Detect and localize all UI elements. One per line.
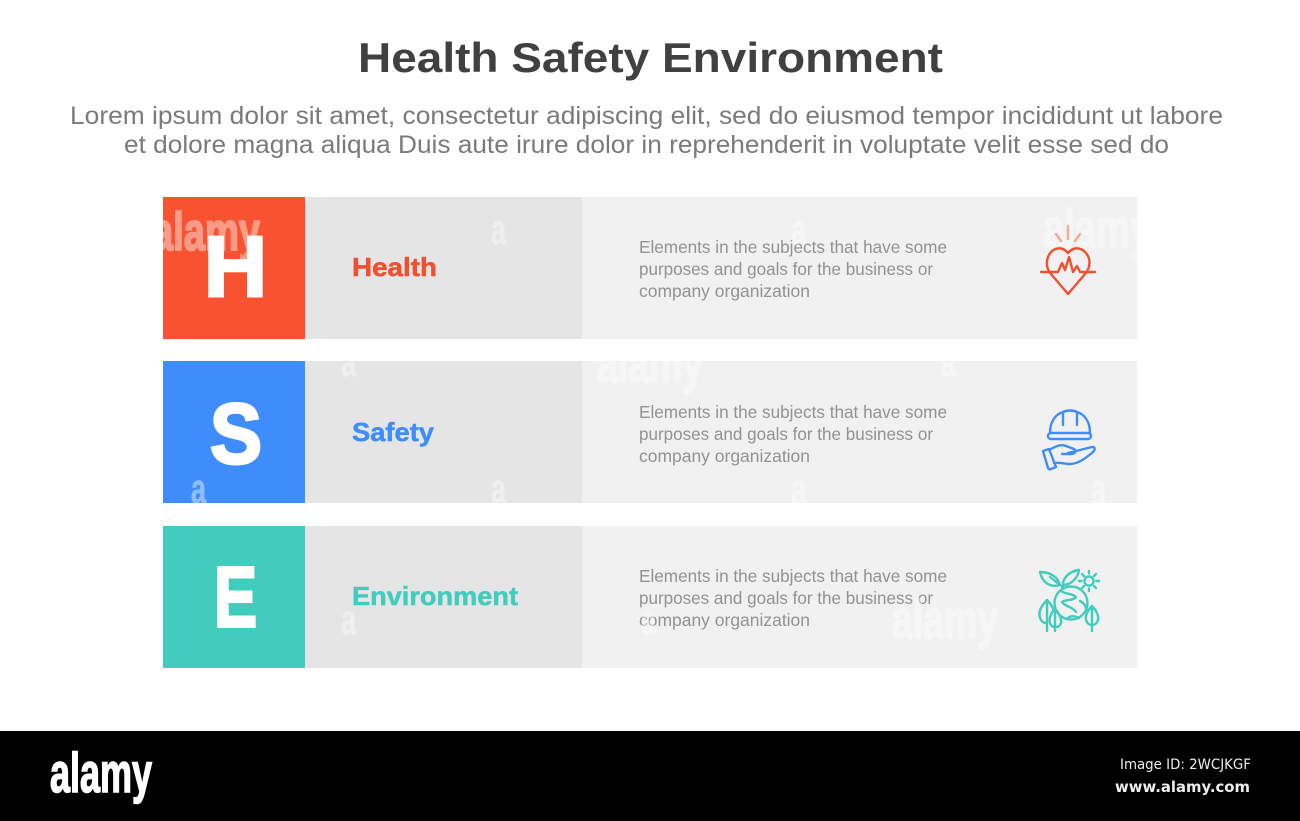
watermark overlays: a xyxy=(641,596,656,643)
icon: helmet over hand xyxy=(1043,410,1095,469)
description: environment: Elements in the subjects that have some xyxy=(639,566,947,586)
description: health: company organization xyxy=(639,281,810,301)
description: safety: Elements in the subjects that have some xyxy=(639,402,947,422)
description: environment xyxy=(639,566,947,630)
watermark overlays: a xyxy=(791,465,806,512)
watermark overlays: a xyxy=(341,338,356,385)
panel: health row xyxy=(163,197,1137,339)
watermark overlays: a xyxy=(191,465,206,512)
letter tile: H xyxy=(163,197,305,339)
image id: Image ID: 2WCJKGF xyxy=(1120,757,1251,773)
watermark overlays: a xyxy=(941,338,956,385)
description: health: purposes and goals for the business or xyxy=(639,259,933,279)
letter S: S xyxy=(210,387,262,482)
subtitle text: et dolore magna aliqua Duis aute irure dolor in reprehenderit in voluptate velit esse sed do xyxy=(124,131,1169,159)
watermark overlays: a xyxy=(341,596,356,643)
description: safety: company organization xyxy=(639,446,810,466)
panel: environment row xyxy=(163,526,1137,668)
icon: earth with leaves, sun and trees xyxy=(1039,570,1099,631)
description: environment: purposes and goals for the business or xyxy=(639,588,933,608)
watermark overlays: alamy xyxy=(152,202,260,262)
description: environment: company organization xyxy=(639,610,810,630)
watermark overlays: a xyxy=(491,206,506,253)
description: safety xyxy=(639,402,947,466)
title: Health Safety Environment xyxy=(358,34,943,81)
watermark overlays: alamy xyxy=(597,334,703,394)
watermark overlays: a xyxy=(1091,465,1106,512)
letter E: E xyxy=(214,550,257,646)
description: health: Elements in the subjects that have some xyxy=(639,237,947,257)
description: safety: purposes and goals for the business or xyxy=(639,424,933,444)
subtitle text xyxy=(70,102,1223,159)
panel: safety row xyxy=(163,361,1137,503)
label: Environment: Environment xyxy=(352,581,518,611)
letter H: H xyxy=(204,220,267,315)
website: www.alamy.com xyxy=(1115,778,1250,796)
watermark overlays: a xyxy=(491,465,506,512)
watermark overlays: a xyxy=(791,206,806,253)
description: health xyxy=(639,237,947,301)
subtitle text: Lorem ipsum dolor sit amet, consectetur adipiscing elit, sed do eiusmod tempor incididunt ut labore xyxy=(70,102,1223,130)
footer bar xyxy=(0,731,1300,821)
label: Safety: Safety xyxy=(352,417,435,447)
letter tile: E xyxy=(163,526,305,668)
icon: heart with pulse xyxy=(1041,226,1095,294)
label: Health: Health xyxy=(352,252,437,282)
watermark overlays xyxy=(152,199,1151,650)
footer logo: alamy xyxy=(50,741,152,804)
letter tile: S xyxy=(163,361,305,503)
watermark overlays: alamy xyxy=(892,590,998,650)
